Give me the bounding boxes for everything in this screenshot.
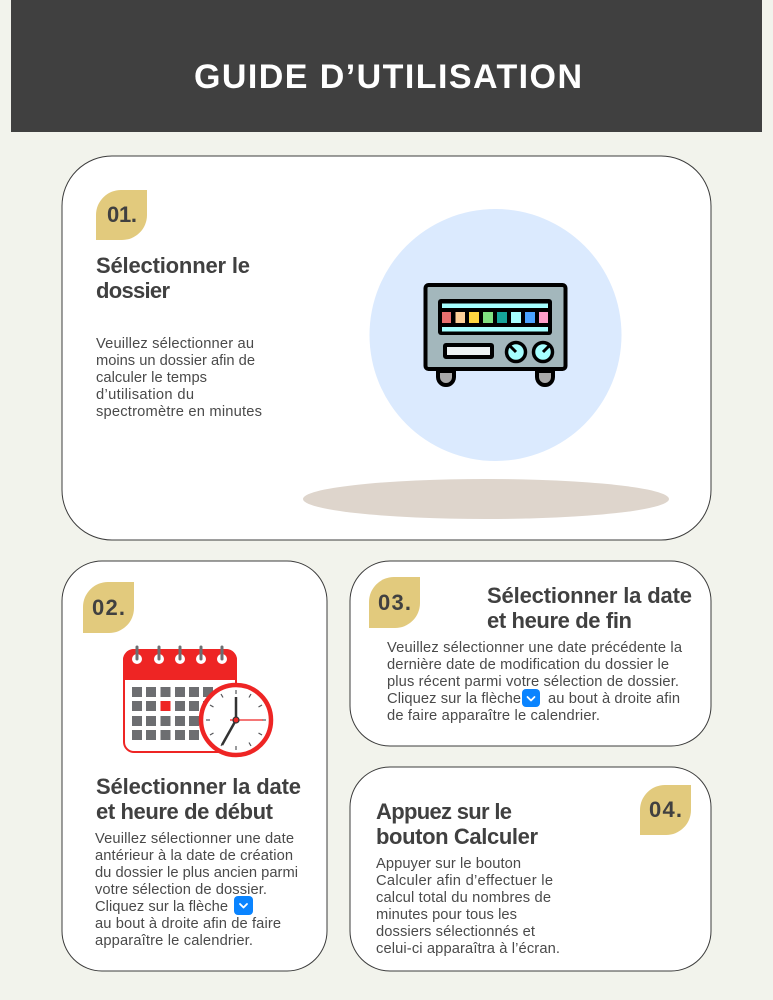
heading: step 2: Sélectionner la date: [96, 774, 301, 799]
text block: step 3: plus récent parmi votre sélection de dossier.: [387, 674, 679, 690]
badge 04: [640, 785, 691, 835]
badge 02: [83, 582, 134, 633]
text block: step 1: d’utilisation du: [96, 387, 194, 403]
text block: step 3: dernière date de modification du dossier le: [387, 657, 669, 673]
icon: blue dropdown arrow: [522, 689, 540, 707]
heading: step 4: Appuez sur le: [376, 799, 512, 824]
badge 02: 02.: [92, 595, 125, 620]
text block: step 4: Appuyer sur le bouton: [376, 856, 521, 872]
badge 01: 01.: [107, 202, 137, 227]
ground shadow ellipse: [303, 479, 669, 519]
icon: spectrometer: [426, 285, 566, 385]
panel: step 2 start date: [62, 561, 327, 971]
text block: step 4: [376, 856, 560, 957]
text block: step 1: spectromètre en minutes: [96, 404, 262, 420]
illustration backdrop circle: [370, 209, 622, 461]
text block: step 2: Veuillez sélectionner une date: [95, 831, 294, 847]
text block: step 2: au bout à droite afin de faire: [95, 916, 281, 932]
heading: step 2: [96, 774, 301, 824]
badge 03: [369, 577, 420, 628]
text block: step 3: au bout à droite afin: [548, 691, 680, 707]
heading: step 4: bouton Calculer: [376, 824, 538, 849]
title banner: [11, 0, 762, 132]
text block: step 3: de faire apparaître le calendrier.: [387, 708, 600, 724]
heading: step 4: [376, 799, 538, 849]
text block: step 3: [387, 640, 683, 724]
text block: step 3: Veuillez sélectionner une date précédente la: [387, 640, 683, 656]
heading: step 3: [487, 583, 692, 633]
text block: step 3: Cliquez sur la flèche: [387, 691, 521, 707]
badge 04: 04.: [649, 797, 682, 822]
text block: step 1: Veuillez sélectionner au: [96, 336, 254, 352]
title: GUIDE D’UTILISATION: [194, 58, 582, 96]
text block: step 2: du dossier le plus ancien parmi: [95, 865, 298, 881]
text block: step 1: calculer le temps: [96, 370, 207, 386]
heading: step 1: [96, 253, 250, 303]
heading: step 2: et heure de début: [96, 799, 274, 824]
text block: step 4: Calculer afin d’effectuer le: [376, 873, 553, 889]
text block: step 4: minutes pour tous les: [376, 907, 517, 923]
heading: step 1: Sélectionner le: [96, 253, 250, 278]
text block: step 2: votre sélection de dossier.: [95, 882, 267, 898]
text block: step 2: Cliquez sur la flèche: [95, 899, 228, 915]
heading: step 3: Sélectionner la date: [487, 583, 692, 608]
badge 03: 03.: [378, 590, 411, 615]
text block: step 2: antérieur à la date de création: [95, 848, 293, 864]
icon: calendar and clock: [123, 647, 271, 755]
text block: step 4: celui-ci apparaîtra à l’écran.: [376, 941, 560, 957]
panel: step 1 select folder: [62, 156, 711, 540]
text block: step 1: [96, 336, 262, 420]
panel: step 3 end date: [350, 561, 711, 746]
text block: step 4: dossiers sélectionnés et: [376, 924, 535, 940]
text block: step 2: apparaître le calendrier.: [95, 933, 253, 949]
heading: step 1: dossier: [96, 278, 170, 303]
badge 01: [96, 190, 147, 240]
icon: blue dropdown arrow: [234, 896, 253, 915]
text block: step 4: calcul total du nombres de: [376, 890, 551, 906]
text block: step 2: [95, 831, 298, 949]
panel: step 4 calculate button: [350, 767, 711, 971]
text block: step 1: moins un dossier afin de: [96, 353, 255, 369]
heading: step 3: et heure de fin: [487, 608, 632, 633]
